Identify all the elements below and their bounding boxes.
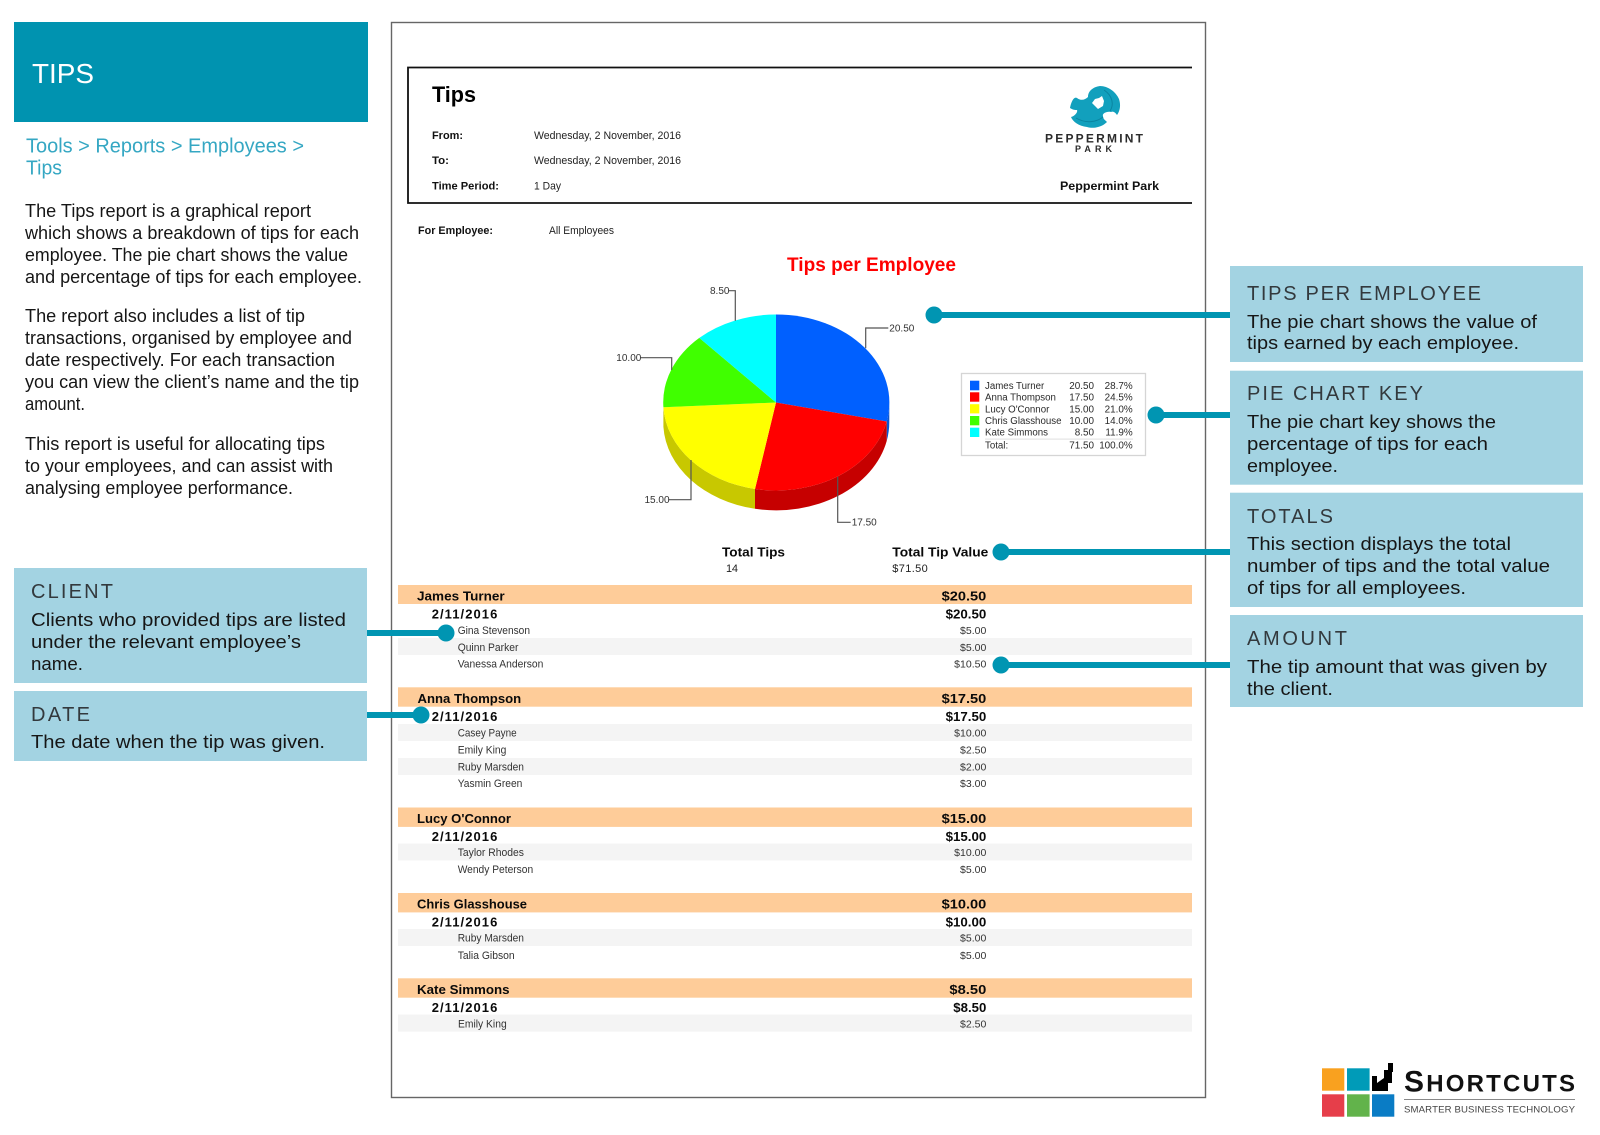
employee group: Kate Simmons: $8.50 xyxy=(949,982,986,997)
callout: client xyxy=(14,568,367,683)
icon: Peppermint Park logo xyxy=(1045,86,1144,154)
callout: amount: the client. xyxy=(1247,679,1333,699)
employee group: James Turner: $5.00 xyxy=(960,625,986,637)
totals section: Total Tips xyxy=(722,545,785,560)
employee group: Lucy O'Connor: 2/11/2016 xyxy=(432,829,497,844)
callout: pie chart key: employee. xyxy=(1247,456,1338,476)
employee group: Anna Thompson: Anna Thompson xyxy=(418,691,521,706)
employee group: James Turner: $20.50 xyxy=(946,607,986,622)
employee group: Kate Simmons: $2.50 xyxy=(960,1018,986,1030)
employee group: James Turner: Gina Stevenson xyxy=(458,625,530,637)
callout: date: DATE xyxy=(31,704,90,726)
callout: totals: This section displays the total xyxy=(1247,534,1511,554)
employee group: James Turner xyxy=(398,585,1192,671)
intro paragraph 1 xyxy=(24,201,362,287)
callout: client: name. xyxy=(31,654,83,674)
pie chart key: 100.0% xyxy=(1099,441,1133,452)
breadcrumb: Tools > Reports > Employees > xyxy=(26,136,304,158)
employee group: Chris Glasshouse: $10.00 xyxy=(942,897,986,912)
totals section: $71.50 xyxy=(892,563,928,575)
report header: Tips xyxy=(432,82,476,107)
icon: Shortcuts logo: SMARTER BUSINESS TECHNOLOGY xyxy=(1404,1104,1576,1115)
employee group: Anna Thompson: $3.00 xyxy=(960,778,986,790)
callout: client: CLIENT xyxy=(31,581,113,603)
employee group: Lucy O'Connor: $10.00 xyxy=(954,847,986,859)
employee group: Anna Thompson: 2/11/2016 xyxy=(432,709,497,724)
panel: left intro xyxy=(14,22,368,498)
employee group: Kate Simmons: 2/11/2016 xyxy=(432,1000,497,1015)
employee group: Kate Simmons: Kate Simmons xyxy=(417,982,510,997)
employee group: Chris Glasshouse: 2/11/2016 xyxy=(432,915,497,930)
intro paragraph 1: and percentage of tips for each employee. xyxy=(25,267,362,287)
for employee filter: All Employees xyxy=(549,225,614,237)
arrow: tips per employee connector xyxy=(926,306,1230,324)
totals section xyxy=(722,545,988,575)
employee group: Chris Glasshouse: Ruby Marsden xyxy=(458,933,524,945)
callout: pie chart key xyxy=(1230,371,1583,485)
callout: amount: AMOUNT xyxy=(1247,628,1347,650)
callout: tips per employee xyxy=(1230,266,1583,362)
arrow: totals connector xyxy=(992,544,1230,560)
arrow: pie chart key connector xyxy=(1148,406,1230,424)
title banner xyxy=(14,22,368,122)
callout: amount: The tip amount that was given by xyxy=(1247,657,1547,677)
employee group: Anna Thompson: Emily King xyxy=(458,744,506,756)
employee group: James Turner: Vanessa Anderson xyxy=(458,659,543,671)
report header: From: xyxy=(432,130,463,142)
intro paragraph 2: you can view the client’s name and the tip xyxy=(25,372,359,392)
pie chart xyxy=(616,286,915,529)
pie chart key: 20.50 xyxy=(1069,381,1095,392)
callout: tips per employee: The pie chart shows the value of xyxy=(1247,312,1538,332)
pie chart key: Anna Thompson xyxy=(985,393,1056,404)
pie chart key: 28.7% xyxy=(1105,381,1133,392)
pie chart key: 17.50 xyxy=(1069,393,1095,404)
employee group: James Turner: James Turner xyxy=(417,589,505,604)
pie chart key: 8.50 xyxy=(1075,428,1094,439)
callout: totals: number of tips and the total value xyxy=(1247,556,1550,576)
callout: date: The date when the tip was given. xyxy=(31,732,325,752)
employee group: Anna Thompson: $10.00 xyxy=(954,728,986,740)
intro paragraph 1: The Tips report is a graphical report xyxy=(25,201,311,221)
employee group: Kate Simmons: Emily King xyxy=(458,1018,507,1030)
callout: totals: TOTALS xyxy=(1247,506,1333,528)
employee group: Lucy O'Connor: Lucy O'Connor xyxy=(417,811,511,826)
employee group: Anna Thompson: Ruby Marsden xyxy=(458,761,524,773)
pie value labels: 10.00 xyxy=(616,353,642,364)
totals section: 14 xyxy=(726,563,738,575)
callout: totals xyxy=(1230,493,1583,607)
pie chart key: Lucy O'Connor xyxy=(985,404,1050,415)
for employee filter xyxy=(418,225,614,237)
employee group: Anna Thompson: $17.50 xyxy=(942,691,986,706)
totals section: Total Tip Value xyxy=(892,545,988,560)
pie chart key: 24.5% xyxy=(1105,393,1133,404)
pie chart key xyxy=(962,374,1146,456)
employee group: Anna Thompson: Casey Payne xyxy=(458,728,517,740)
intro paragraph 2: date respectively. For each transaction xyxy=(25,350,335,370)
pie chart key: Kate Simmons xyxy=(985,428,1048,439)
employee group: Kate Simmons: $8.50 xyxy=(953,1000,986,1015)
employee group: Lucy O'Connor: Wendy Peterson xyxy=(458,864,533,876)
intro paragraph 3: to your employees, and can assist with xyxy=(25,456,333,476)
employee group: Anna Thompson xyxy=(398,687,1192,790)
employee group: Lucy O'Connor: Taylor Rhodes xyxy=(458,847,524,859)
report header: Wednesday, 2 November, 2016 xyxy=(534,155,681,167)
pie value labels: 17.50 xyxy=(852,518,877,529)
pie value labels: 15.00 xyxy=(644,495,670,506)
employee group: Anna Thompson: $17.50 xyxy=(946,709,986,724)
pie chart key: Chris Glasshouse xyxy=(985,416,1061,427)
callout: tips per employee: tips earned by each employee. xyxy=(1247,333,1519,353)
pie chart key: 21.0% xyxy=(1105,404,1133,415)
report header: To: xyxy=(432,155,449,167)
employee group: Chris Glasshouse xyxy=(398,893,1192,962)
intro paragraph 3: analysing employee performance. xyxy=(25,478,293,498)
icon: Peppermint Park logo: PEPPERMINT xyxy=(1045,131,1144,145)
report header: 1 Day xyxy=(534,180,561,192)
report header: Peppermint Park xyxy=(1060,179,1159,193)
callout: pie chart key: PIE CHART KEY xyxy=(1247,383,1423,405)
breadcrumb: Tips xyxy=(26,158,62,180)
report header: Time Period: xyxy=(432,180,499,192)
intro paragraph 2 xyxy=(25,306,359,414)
employee group: Lucy O'Connor xyxy=(398,808,1192,876)
icon: Peppermint Park logo: PARK xyxy=(1075,144,1112,154)
callout: client: under the relevant employee’s xyxy=(31,632,301,652)
intro paragraph 3 xyxy=(25,434,333,498)
report header xyxy=(408,68,1192,203)
employee group: Chris Glasshouse: Chris Glasshouse xyxy=(417,897,527,912)
intro paragraph 3: This report is useful for allocating tips xyxy=(25,434,325,454)
title banner: TIPS xyxy=(32,58,94,89)
employee group: Lucy O'Connor: $15.00 xyxy=(946,829,986,844)
arrow: amount connector xyxy=(992,656,1230,674)
employee group: James Turner: Quinn Parker xyxy=(458,642,519,654)
pie value labels xyxy=(616,286,915,529)
callout: date xyxy=(14,691,367,761)
employee group: James Turner: $5.00 xyxy=(960,642,986,654)
intro paragraph 2: The report also includes a list of tip xyxy=(25,306,305,326)
intro paragraph 1: employee. The pie chart shows the value xyxy=(25,245,348,265)
employee group: James Turner: $10.50 xyxy=(954,659,986,671)
employee group: Anna Thompson: Yasmin Green xyxy=(458,778,522,790)
employee group: Chris Glasshouse: $10.00 xyxy=(946,915,986,930)
icon: Shortcuts logo: SHORTCUTS xyxy=(1404,1065,1575,1098)
employee group: Lucy O'Connor: $15.00 xyxy=(942,811,986,826)
pie chart key: Total: xyxy=(985,441,1008,452)
employee group: Chris Glasshouse: $5.00 xyxy=(960,950,986,962)
pie chart key: James Turner xyxy=(985,381,1045,392)
pie chart key: 11.9% xyxy=(1105,428,1133,439)
pie value labels: 8.50 xyxy=(710,286,730,297)
callout: totals: of tips for all employees. xyxy=(1247,578,1466,598)
callout: pie chart key: The pie chart key shows the xyxy=(1247,412,1496,432)
pie chart key: 14.0% xyxy=(1105,416,1133,427)
pie value labels: 20.50 xyxy=(889,323,915,334)
pie chart key: 10.00 xyxy=(1069,416,1095,427)
employee group: Chris Glasshouse: Talia Gibson xyxy=(458,950,515,962)
employee group: Chris Glasshouse: $5.00 xyxy=(960,933,986,945)
arrow: client connector xyxy=(367,624,454,642)
callout: tips per employee: TIPS PER EMPLOYEE xyxy=(1247,283,1481,305)
intro paragraph 1: which shows a breakdown of tips for each xyxy=(24,223,359,243)
pie chart key: 15.00 xyxy=(1069,404,1095,415)
intro paragraph 2: transactions, organised by employee and xyxy=(25,328,352,348)
employee group: Anna Thompson: $2.00 xyxy=(960,761,986,773)
panel: report frame xyxy=(392,22,1206,1098)
arrow: date connector xyxy=(367,706,430,724)
employee group: Lucy O'Connor: $5.00 xyxy=(960,864,986,876)
callout: amount xyxy=(1230,615,1583,707)
breadcrumb xyxy=(26,136,304,180)
report header: Wednesday, 2 November, 2016 xyxy=(534,130,681,142)
employee group: Kate Simmons xyxy=(398,978,1192,1032)
employee group: James Turner: $20.50 xyxy=(942,589,986,604)
employee group: James Turner: 2/11/2016 xyxy=(432,607,497,622)
chart title: Tips per Employee xyxy=(787,255,956,276)
pie chart key: 71.50 xyxy=(1069,441,1095,452)
callout: client: Clients who provided tips are listed xyxy=(31,610,346,630)
icon: Shortcuts logo xyxy=(1322,1063,1576,1117)
callout: pie chart key: percentage of tips for each xyxy=(1247,434,1488,454)
for employee filter: For Employee: xyxy=(418,225,493,237)
employee group: Anna Thompson: $2.50 xyxy=(960,744,986,756)
intro paragraph 2: amount. xyxy=(25,394,85,414)
